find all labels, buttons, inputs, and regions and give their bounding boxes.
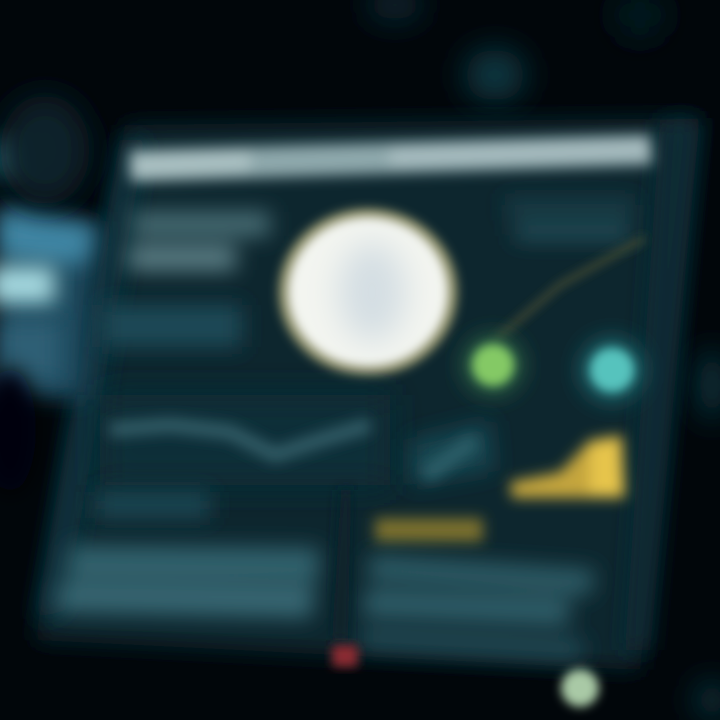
top-right text block — [505, 200, 635, 239]
title bar — [130, 135, 652, 182]
diagonal connector line — [495, 238, 645, 340]
red marker — [332, 645, 358, 667]
vertical divider — [332, 490, 352, 640]
panel edge left — [35, 140, 145, 620]
lower left wave chart — [100, 395, 390, 485]
top-left text block — [128, 212, 270, 270]
lower right mini chart — [410, 420, 495, 485]
main tilted panel — [35, 118, 700, 670]
left lower heading — [95, 492, 210, 518]
left lower text block — [55, 545, 320, 618]
background glow spots — [367, 0, 720, 718]
panel edge right — [625, 118, 700, 650]
teal node — [580, 338, 644, 402]
central white circle — [278, 208, 458, 376]
yellow label — [375, 518, 483, 542]
left side panel — [0, 95, 100, 492]
right lower text block — [360, 555, 595, 660]
pale green marker — [561, 669, 599, 707]
green node — [463, 335, 523, 395]
yellow area chart — [510, 435, 625, 498]
second left text block — [102, 305, 242, 347]
